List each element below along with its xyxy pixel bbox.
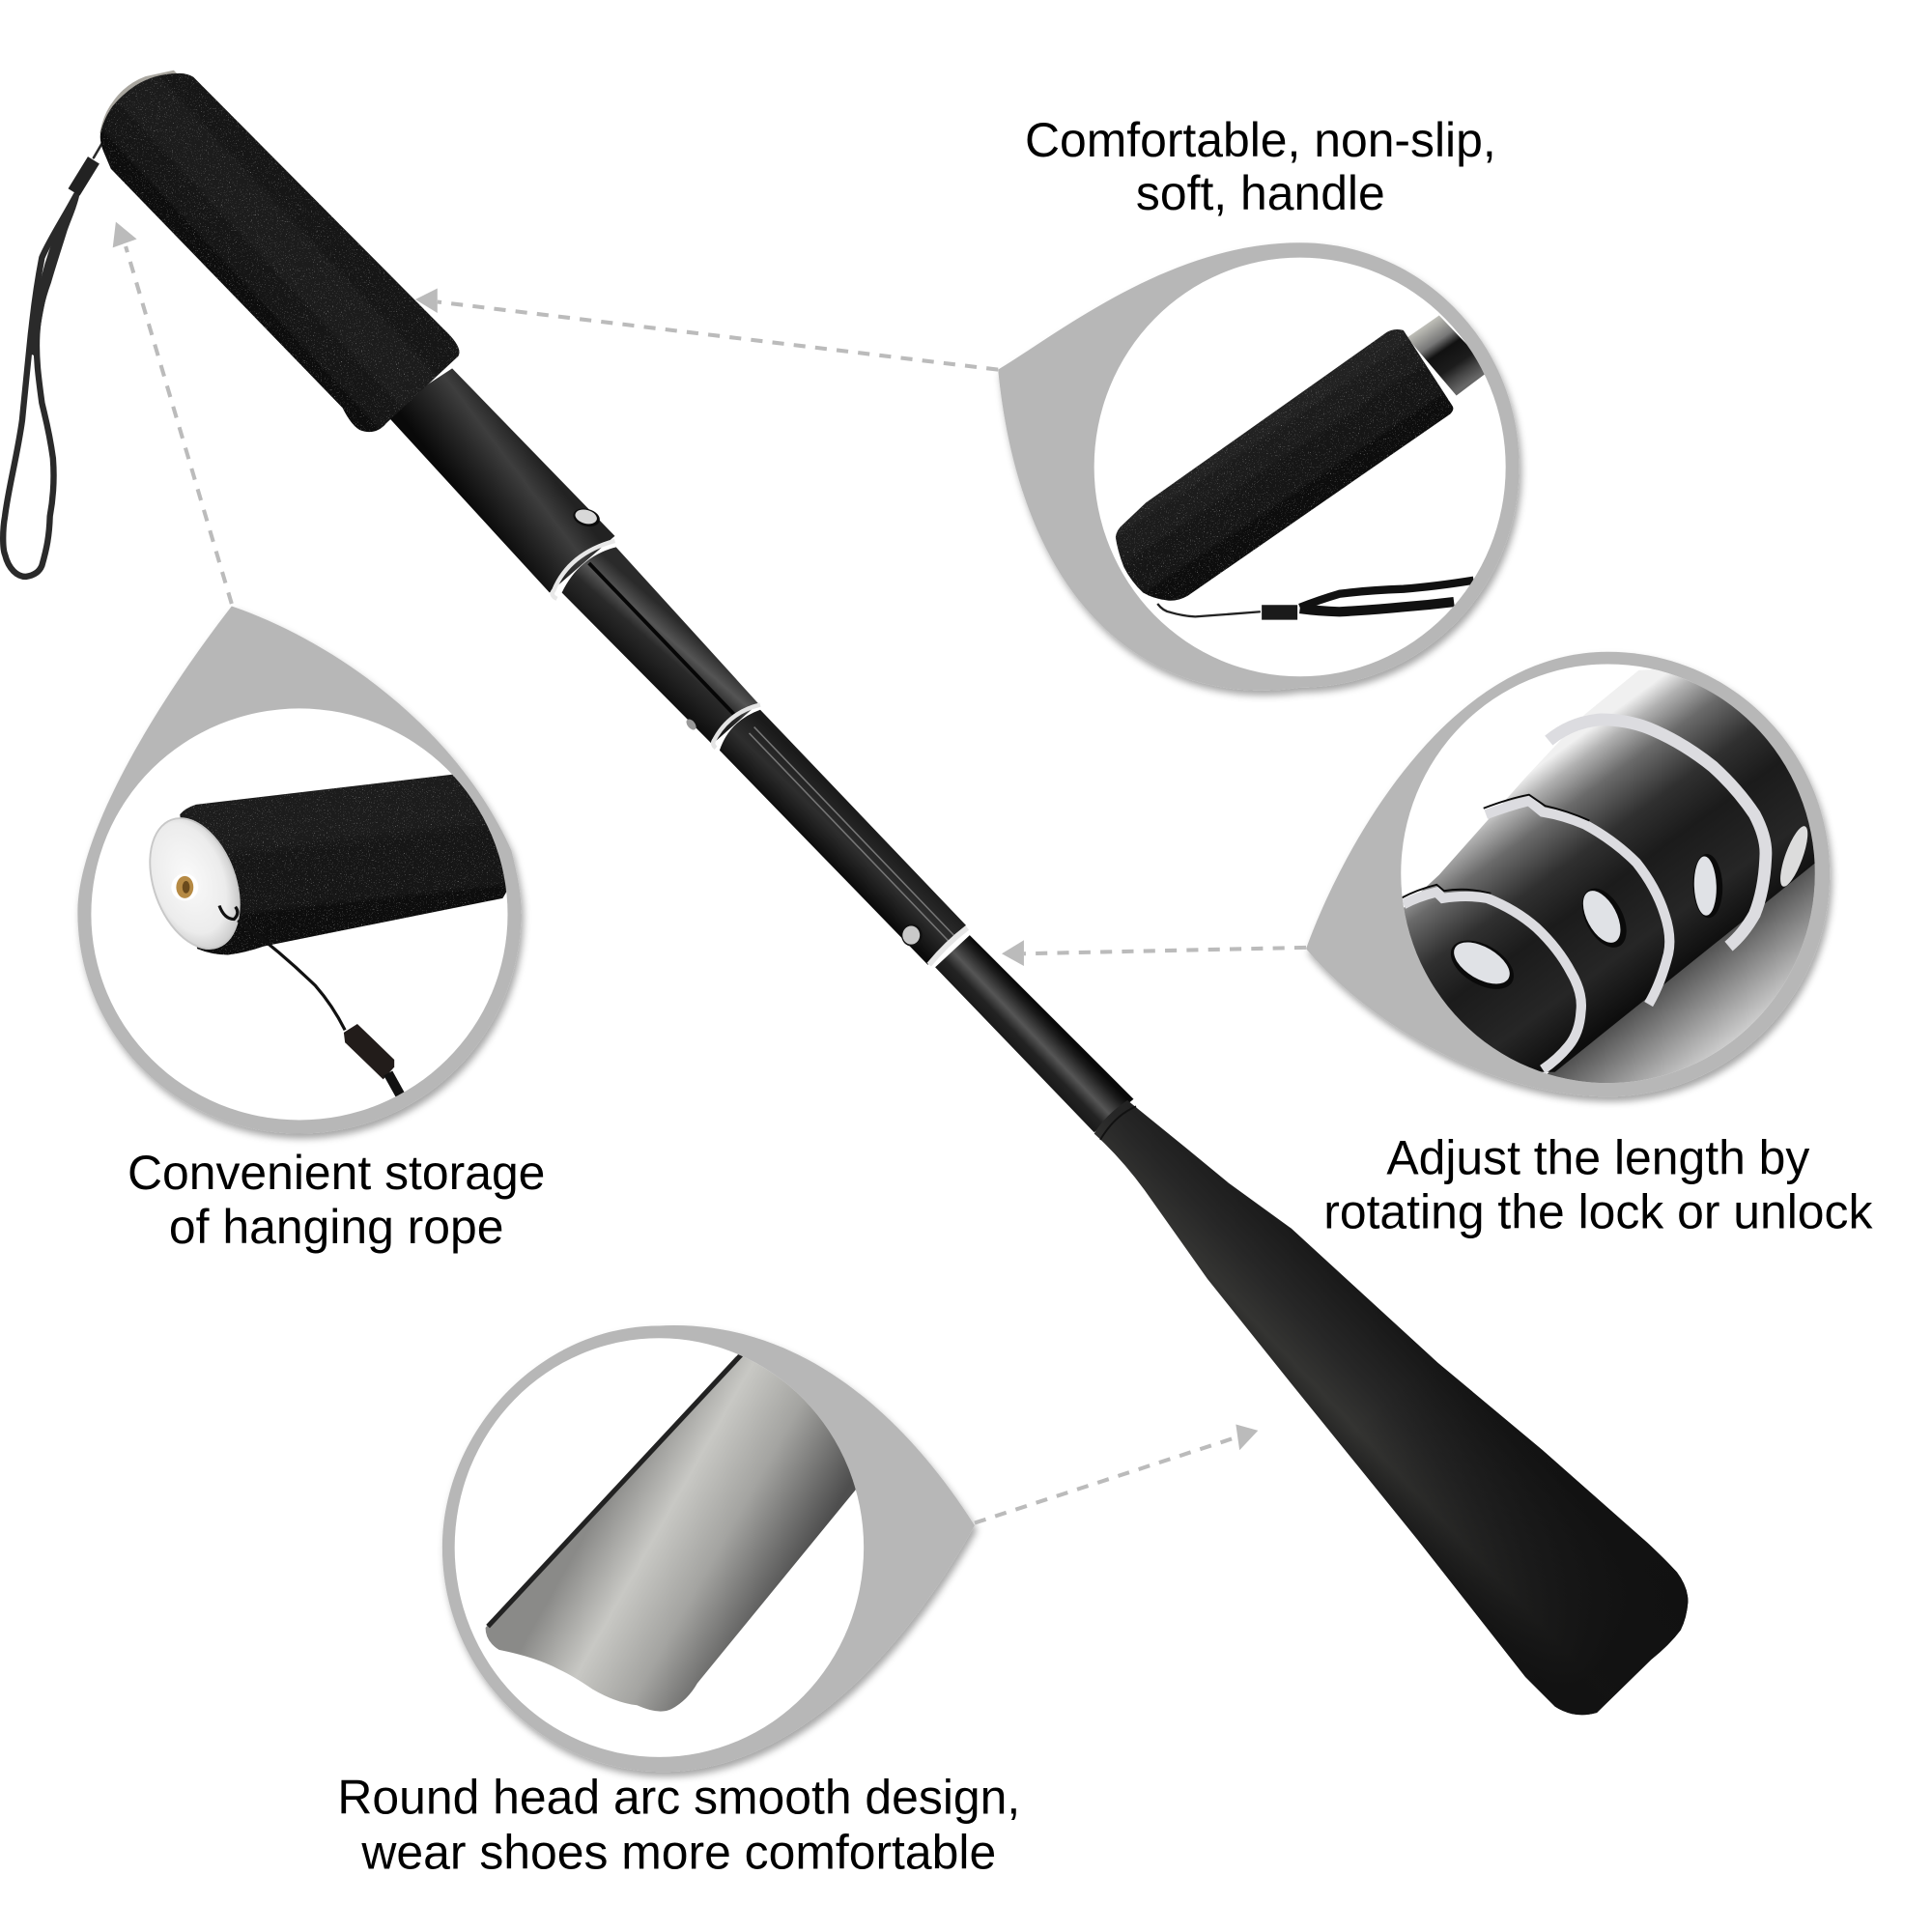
label: length adjust: Adjust the length by <box>1386 1131 1809 1185</box>
callout: handle <box>998 242 1520 691</box>
callout shape <box>1306 652 1830 1096</box>
metal tube section 4 <box>935 935 1133 1132</box>
label: handle: Comfortable, non-slip, <box>1025 113 1496 167</box>
metal tube section 1 <box>384 368 614 593</box>
label: rope storage: Convenient storage <box>128 1146 545 1200</box>
label: handle: soft, handle <box>1136 166 1385 220</box>
middle ring <box>1486 801 1669 1005</box>
label: rope storage: of hanging rope <box>169 1200 503 1254</box>
lock ring 1 <box>553 541 614 599</box>
foam handle <box>100 73 460 432</box>
label: length adjust: rotating the lock or unlock <box>1323 1185 1872 1239</box>
close-up: locking rings <box>1403 669 1815 1084</box>
callout: round head <box>442 1325 975 1772</box>
small hole <box>685 718 698 731</box>
arrow: lock <box>1002 940 1306 966</box>
lock dot 1 <box>571 505 602 529</box>
hanging rope <box>3 143 102 577</box>
far ring <box>1548 720 1766 947</box>
arrow: handle <box>415 288 998 370</box>
end cap <box>99 71 180 135</box>
tube body <box>1404 669 1814 1072</box>
lock buttons <box>1451 941 1514 989</box>
metal tube section 3 <box>720 710 966 965</box>
product: telescopic shoe horn <box>3 71 1688 1715</box>
near ring <box>1404 892 1581 1069</box>
lock ring 3 <box>929 927 967 965</box>
callout shape <box>442 1325 975 1772</box>
label: round head: wear shoes more comfortable <box>360 1825 996 1879</box>
label: round head: Round head arc smooth design, <box>337 1771 1020 1825</box>
callout: length adjust <box>1306 652 1848 1096</box>
arrow: rope <box>113 222 232 604</box>
shoe horn blade <box>1094 1100 1688 1715</box>
close-up: grey blade <box>486 1343 875 1712</box>
callout: rope storage <box>77 607 524 1133</box>
close-up: end cap and rope <box>133 775 524 1095</box>
close-up: foam handle <box>1116 316 1491 616</box>
lock dot 2 <box>901 924 923 947</box>
arrow: head <box>975 1424 1258 1523</box>
lock ring 2 <box>713 705 760 748</box>
metal tube section 2 <box>562 547 758 744</box>
callout shape <box>77 607 522 1133</box>
callout shape <box>998 242 1520 691</box>
